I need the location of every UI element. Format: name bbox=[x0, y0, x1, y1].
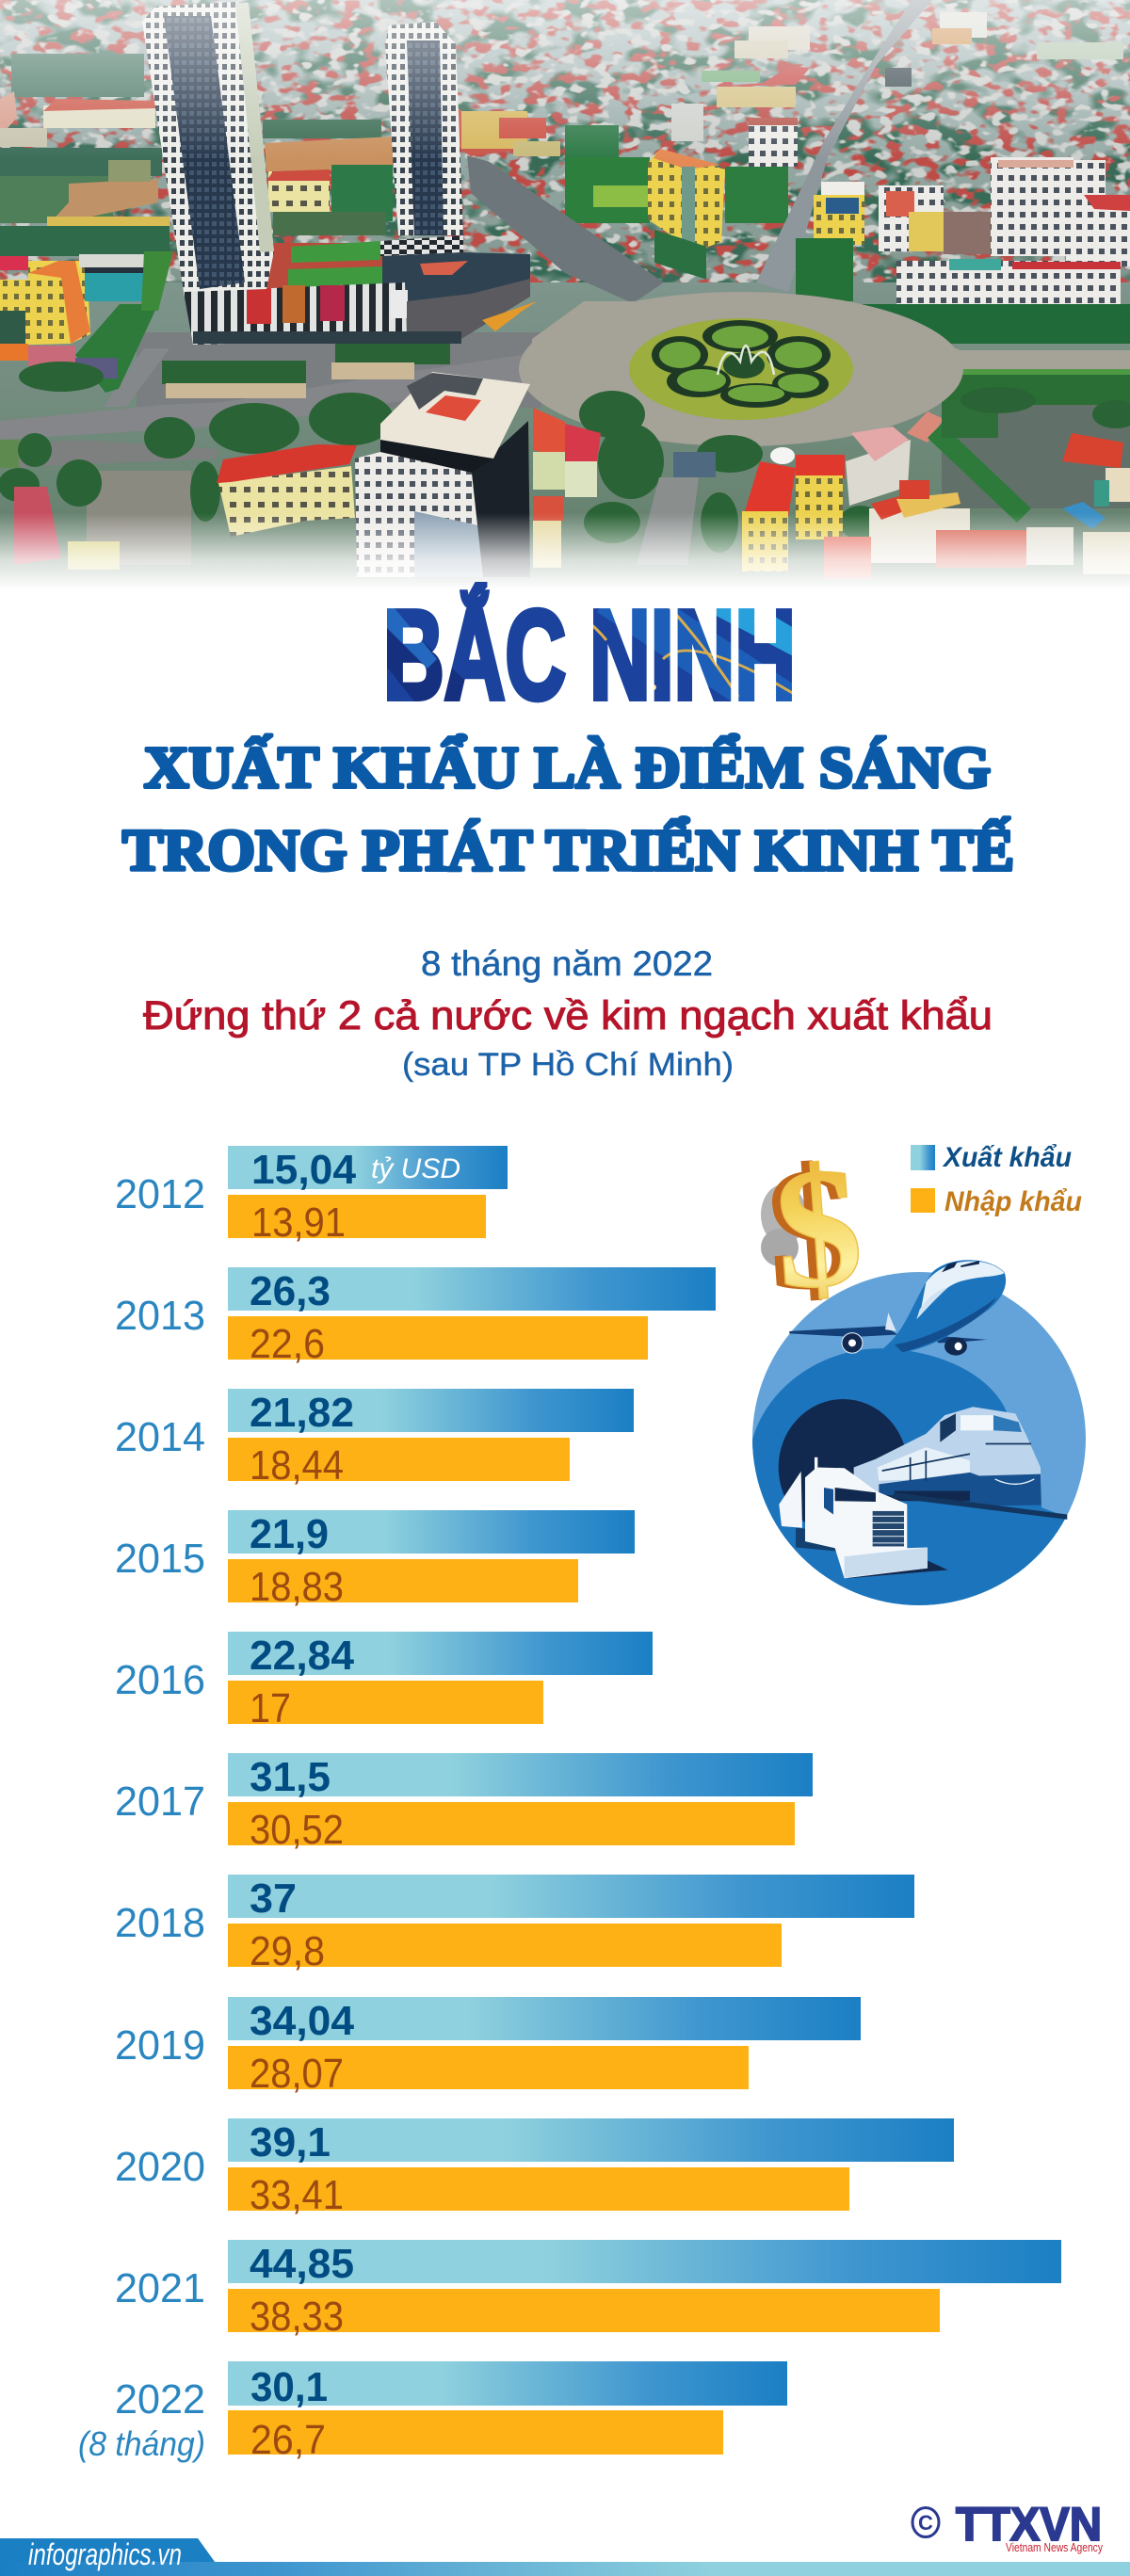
hotel bbox=[648, 149, 725, 251]
row: 2015: 18,83 bbox=[250, 1564, 344, 1610]
icon: transport circle with plane, train and truck bbox=[747, 1260, 1090, 1622]
row: 2017: 30,52 bbox=[250, 1807, 344, 1853]
row: 2013 bbox=[115, 1267, 716, 1367]
mall bbox=[184, 235, 537, 345]
footer bar with site name: infographics.vn bbox=[28, 2537, 182, 2571]
hero photo: aerial view of Bac Ninh city bbox=[0, 0, 1130, 607]
left yellow building bbox=[0, 261, 90, 346]
row: 2016 bbox=[115, 1632, 653, 1731]
row: 2019: 34,04 bbox=[250, 1998, 355, 2044]
far top buildings bbox=[749, 26, 810, 50]
row: 2022 bbox=[78, 2361, 787, 2463]
row: 2015 bbox=[115, 1510, 635, 1610]
row: 2020: 33,41 bbox=[250, 2172, 344, 2218]
row: 2015: 21,9 bbox=[250, 1511, 329, 1557]
mid-right buildings bbox=[821, 182, 864, 195]
subtitle bbox=[122, 735, 1014, 883]
row: 2019 bbox=[115, 1997, 861, 2097]
row: 2014 bbox=[115, 1389, 634, 1489]
truck bbox=[779, 1457, 948, 1578]
title: BAC NINH: BẮC NINH bbox=[383, 584, 796, 726]
ring road and roundabout bbox=[519, 292, 963, 446]
row: 2018: 37 bbox=[250, 1876, 297, 1922]
mid and lower streets bbox=[137, 332, 541, 408]
row: 2020: 2020 bbox=[115, 2144, 205, 2190]
footer bar with site name bbox=[0, 2537, 1130, 2576]
left green belts and lots bbox=[11, 54, 144, 97]
twin towers bbox=[142, 2, 463, 292]
row: 2015: 2015 bbox=[115, 1536, 205, 1582]
legend: Xuất khẩu bbox=[942, 1142, 1072, 1173]
row: 2016: 22,84 bbox=[250, 1633, 355, 1679]
row: 2012: 15,04 bbox=[251, 1147, 357, 1193]
row: 2020 bbox=[115, 2118, 954, 2218]
tunnel bbox=[778, 1399, 904, 1522]
logo: TTXVN: TTXVN bbox=[956, 2498, 1102, 2551]
icon: gold dollar sign: $ bbox=[769, 1131, 868, 1326]
row: 2017: 31,5 bbox=[250, 1754, 331, 1800]
highlight line: Đứng thứ 2 cả nước về kim ngạch xuất khẩu bbox=[143, 993, 993, 1038]
note line: (sau TP Hồ Chí Minh) bbox=[402, 1047, 734, 1083]
row: 2014: 2014 bbox=[115, 1414, 205, 1460]
plane bbox=[789, 1260, 1006, 1356]
right tree belt and road bbox=[861, 304, 1130, 344]
row: 2014: 21,82 bbox=[250, 1390, 354, 1436]
logo: TTXVN: Vietnam News Agency bbox=[1006, 2540, 1103, 2554]
row: 2013: 26,3 bbox=[250, 1268, 331, 1314]
legend bbox=[911, 1142, 1082, 1217]
foreground buildings bbox=[14, 372, 601, 577]
row: 2022: 26,7 bbox=[250, 2417, 326, 2463]
logo: TTXVN: C bbox=[918, 2511, 933, 2535]
row: 2014: 18,44 bbox=[250, 1442, 344, 1489]
period line: 8 tháng năm 2022 bbox=[421, 944, 713, 983]
row: 2019: 28,07 bbox=[250, 2051, 344, 2097]
tree rows bbox=[0, 336, 1130, 553]
logo: TTXVN bbox=[912, 2498, 1103, 2554]
row: 2013: 2013 bbox=[115, 1293, 205, 1339]
row: 2018: 29,8 bbox=[250, 1928, 325, 1974]
row: 2020: 39,1 bbox=[250, 2119, 331, 2165]
legend: Nhập khẩu bbox=[944, 1186, 1082, 1217]
row: 2016: 2016 bbox=[115, 1657, 205, 1703]
row: 2018 bbox=[115, 1875, 914, 1974]
row: 2018: 2018 bbox=[115, 1900, 205, 1946]
row: 2012 bbox=[115, 1146, 508, 1246]
row: 2022: 30,1 bbox=[250, 2364, 328, 2410]
row: 2012: 13,91 bbox=[251, 1199, 346, 1246]
icon: gold dollar sign: $ bbox=[762, 1132, 861, 1327]
row: 2017 bbox=[115, 1753, 813, 1853]
row: 2022: 2022 bbox=[115, 2376, 205, 2423]
row: 2019: 2019 bbox=[115, 2022, 205, 2069]
lower left planting bbox=[75, 304, 158, 393]
row: 2017: 2017 bbox=[115, 1779, 205, 1825]
row: 2013: 22,6 bbox=[250, 1321, 325, 1367]
row: 2021 bbox=[115, 2240, 1061, 2340]
row: 2016: 17 bbox=[250, 1685, 291, 1731]
unit label: tỷ USD bbox=[371, 1153, 460, 1184]
row: 2021: 44,85 bbox=[250, 2241, 354, 2287]
row: 2021: 2021 bbox=[115, 2265, 205, 2311]
row: 2021: 38,33 bbox=[250, 2294, 344, 2340]
year note: (8 tháng) bbox=[78, 2424, 205, 2463]
subtitle: XUẤT KHẨU LÀ ĐIỂM SÁNG bbox=[144, 735, 991, 800]
train bbox=[854, 1407, 1067, 1520]
row: 2012: 2012 bbox=[115, 1171, 205, 1217]
green block behind hotel bbox=[565, 157, 650, 223]
subtitle: TRONG PHÁT TRIỂN KINH TẾ bbox=[122, 818, 1014, 883]
boulevards bbox=[467, 155, 664, 303]
